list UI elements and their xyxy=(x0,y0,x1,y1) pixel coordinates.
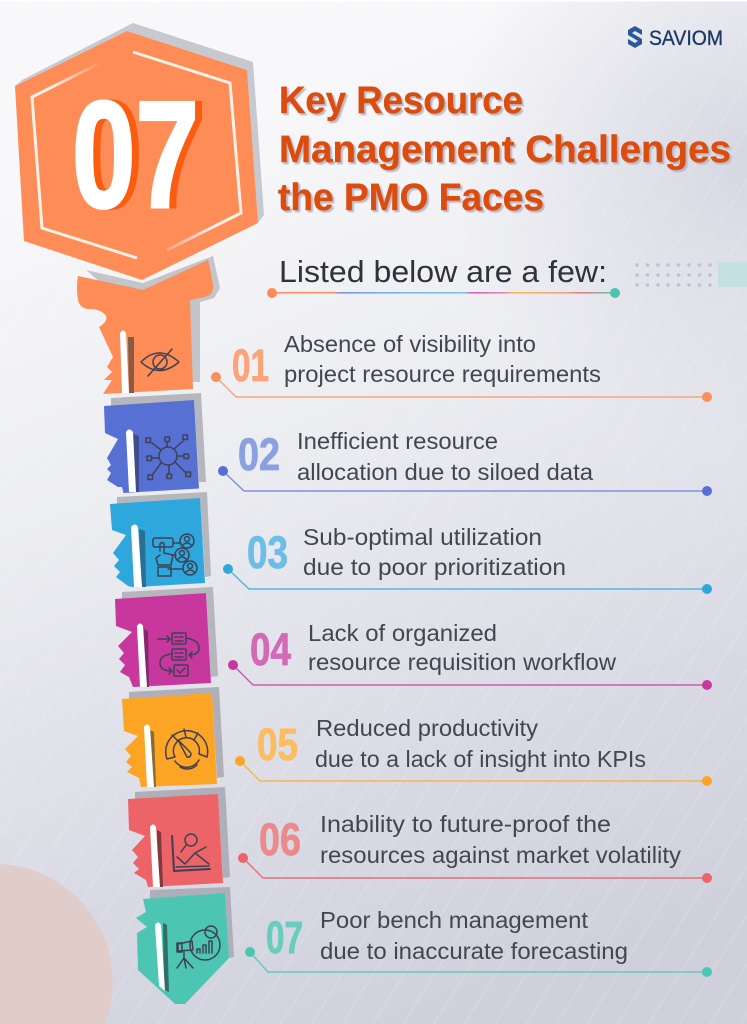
text 04: resource requisition workflow xyxy=(308,649,616,675)
number 06: 06 xyxy=(259,814,301,865)
number 01: 01 xyxy=(232,340,269,391)
text 06: Inability to future-proof the xyxy=(320,811,611,837)
icon: crossed eye xyxy=(141,349,179,376)
connector 02 xyxy=(218,466,712,496)
title: the PMO Faces xyxy=(278,177,544,219)
connector 03 xyxy=(223,564,712,594)
subtitle: Listed below are a few: xyxy=(279,254,607,289)
key segment 06: coral xyxy=(128,787,230,887)
text 05: due to a lack of insight into KPIs xyxy=(315,746,646,772)
item 05 xyxy=(235,715,712,786)
text 01: Absence of visibility into xyxy=(284,331,536,357)
dot grid decoration xyxy=(635,262,747,287)
text 03 xyxy=(303,524,566,580)
icon: KPI gauge xyxy=(166,729,208,769)
connector 05 xyxy=(235,756,712,786)
icon: market chart xyxy=(172,834,210,871)
subtitle rainbow underline xyxy=(267,288,620,298)
key segment 04: magenta xyxy=(115,587,218,687)
text 02: Inefficient resource xyxy=(297,428,498,454)
icon: requisition workflow xyxy=(158,633,199,676)
text 07 xyxy=(320,907,628,964)
title xyxy=(278,80,731,219)
title: Key Resource xyxy=(279,80,523,122)
item 01 xyxy=(211,331,712,402)
hexagon badge: 07 xyxy=(15,23,264,280)
text 04 xyxy=(308,620,616,675)
icon: telescope forecast xyxy=(177,926,220,968)
key segment 07: teal xyxy=(136,887,234,1004)
text 01 xyxy=(284,331,601,387)
text 03: Sub-optimal utilization xyxy=(303,524,542,550)
connector 06 xyxy=(238,853,712,883)
text 06 xyxy=(320,811,682,868)
item 06 xyxy=(238,811,712,883)
number 07: 07 xyxy=(266,912,303,963)
text 05 xyxy=(315,715,646,772)
connector 01 xyxy=(211,372,712,402)
text 05: Reduced productivity xyxy=(316,715,539,741)
text 04: Lack of organized xyxy=(308,620,497,646)
item 02 xyxy=(218,428,712,496)
item 03 xyxy=(223,524,712,594)
connector 04 xyxy=(228,660,712,690)
number 04: 04 xyxy=(250,624,291,675)
number 05: 05 xyxy=(257,719,298,770)
title: Management Challenges xyxy=(279,129,731,171)
icon: team selection xyxy=(153,534,197,576)
key segment 03: light blue xyxy=(110,492,211,587)
connector 07 xyxy=(245,947,712,977)
text 07: Poor bench management xyxy=(320,907,589,933)
item 07 xyxy=(245,907,712,977)
number 03: 03 xyxy=(247,527,288,578)
text 03: due to poor prioritization xyxy=(303,554,566,580)
key segment 05: amber xyxy=(122,687,224,787)
text 06: resources against market volatility xyxy=(320,842,682,868)
text 02: allocation due to siloed data xyxy=(297,459,593,485)
key segment 01: orange key head xyxy=(77,256,220,394)
icon: network hub xyxy=(146,435,190,480)
text 01: project resource requirements xyxy=(284,361,601,387)
badge number shadow: 07 xyxy=(79,70,206,240)
item 04 xyxy=(228,620,712,690)
text 02 xyxy=(297,428,593,485)
badge number: 07 xyxy=(72,70,199,240)
number 02: 02 xyxy=(238,429,280,480)
key segment 02: blue xyxy=(104,393,206,493)
logo: Saviom: SAVIOM xyxy=(649,27,723,50)
text 07: due to inaccurate forecasting xyxy=(320,938,628,964)
